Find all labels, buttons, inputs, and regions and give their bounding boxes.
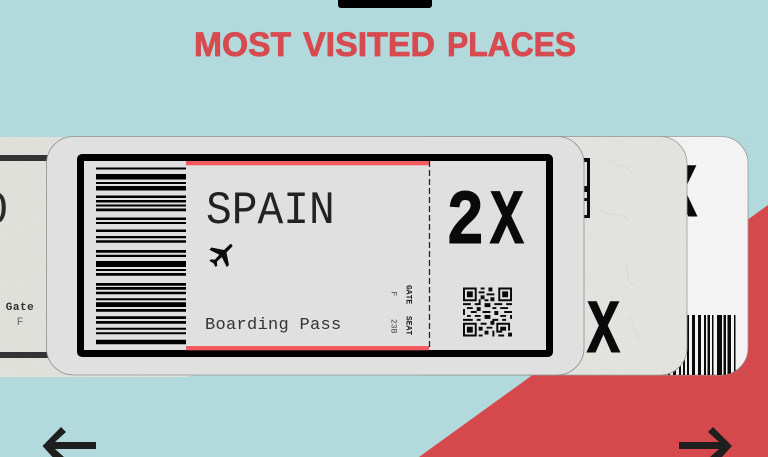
red diagonal shape: [419, 205, 768, 457]
black frame: [80, 158, 550, 354]
ticket card: back right: [560, 136, 748, 376]
seat heading: SEAT: [404, 316, 412, 335]
gate heading: GATE: [404, 285, 412, 304]
gate value: F: [17, 317, 23, 329]
card letter fragment: X: [587, 289, 620, 375]
multiplier number: X: [490, 179, 524, 267]
boarding pass label: Boarding Pass: [205, 316, 342, 335]
seat value: 23B: [388, 319, 398, 334]
ticket card: left: [0, 137, 200, 377]
destination name: SPAIN: [206, 186, 335, 238]
QR code: [463, 288, 512, 336]
barcode: [96, 168, 186, 344]
gate label: Gate: [6, 302, 34, 314]
multiplier number: [446, 179, 524, 267]
red bottom band: [186, 346, 429, 350]
red top band: [186, 161, 429, 165]
icon: left arrow: [42, 427, 96, 457]
vertical barcode: [668, 315, 736, 375]
icon: airplane: [204, 236, 241, 273]
perforation dashed line: [428, 161, 430, 350]
title: MOST: [194, 26, 291, 64]
QR fragment: [584, 158, 590, 218]
title: [194, 26, 576, 64]
gate value: F: [388, 292, 398, 296]
icon: right arrow: [679, 427, 732, 457]
ticket card: middle right: [400, 136, 687, 375]
multiplier number: 2: [446, 180, 484, 267]
title: VISITED: [303, 26, 435, 64]
ticket body: [46, 136, 584, 375]
card letter fragment: X: [664, 153, 697, 239]
card frame: [0, 155, 60, 358]
title: PLACES: [447, 26, 576, 64]
paper fibres: [600, 160, 640, 340]
top black tab: [338, 0, 432, 8]
main boarding pass ticket: [46, 136, 584, 375]
